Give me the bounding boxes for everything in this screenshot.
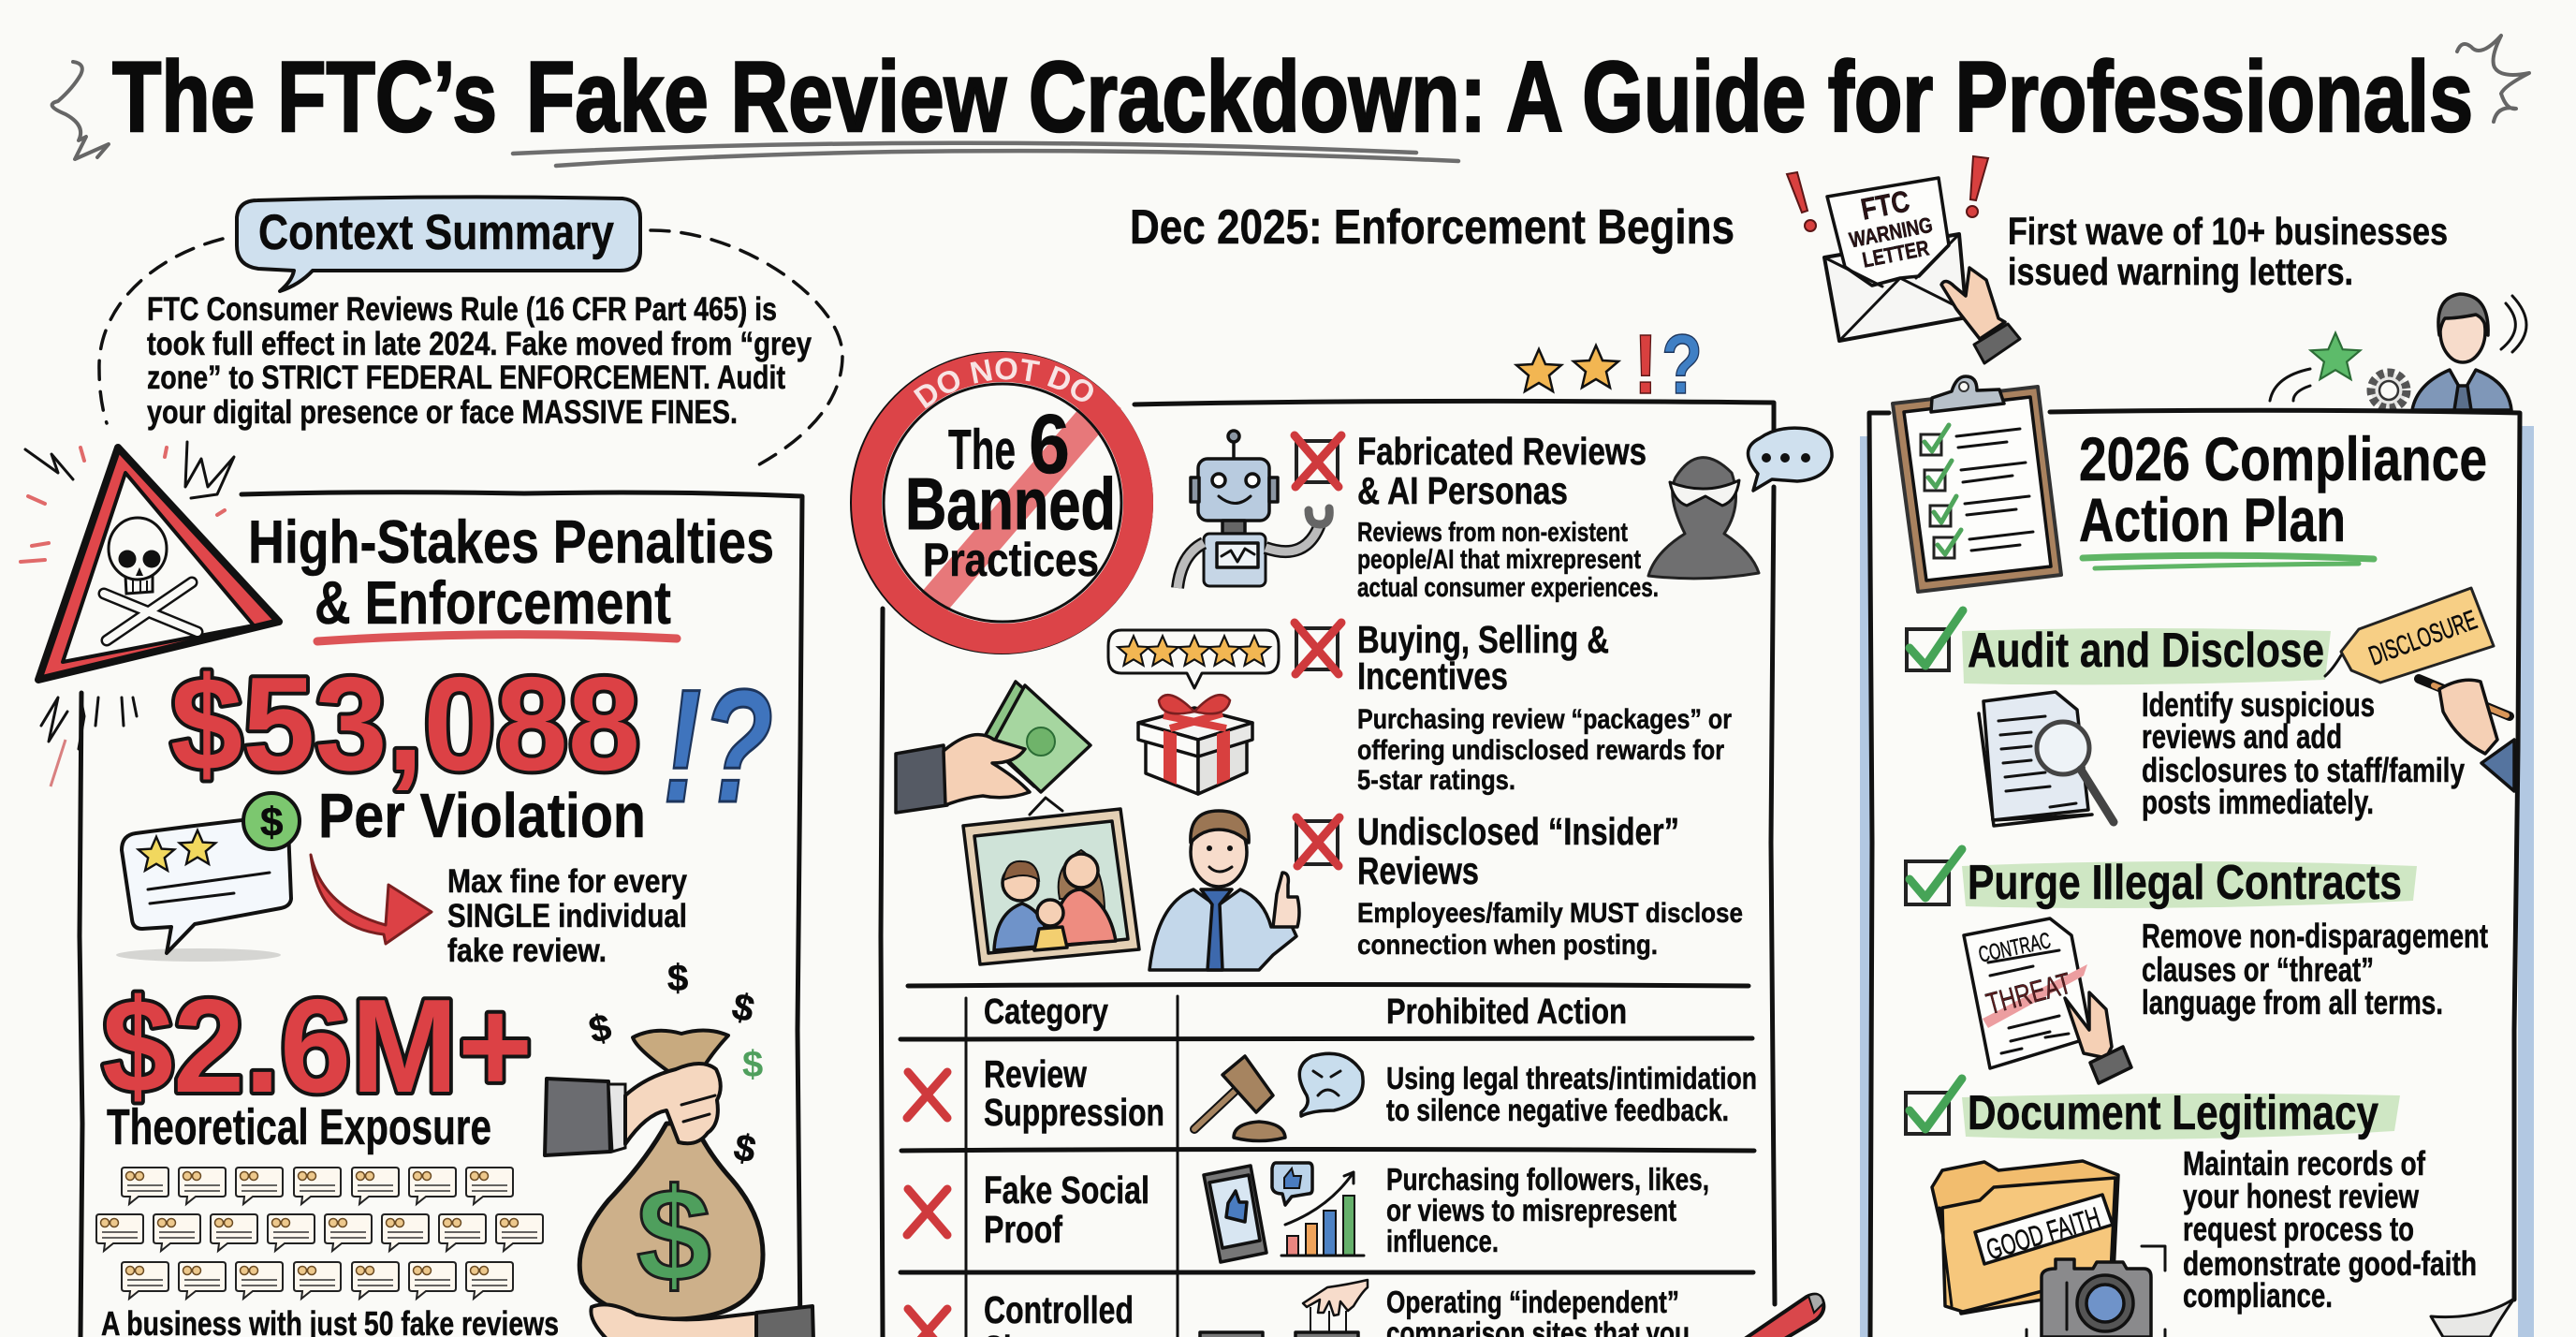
icon: stars and interrobang: !	[1633, 318, 1658, 412]
icon: five star bubble	[1108, 630, 1279, 688]
icon: stars and interrobang: ?	[1661, 318, 1703, 412]
text: first wave	[2008, 210, 2448, 293]
panel: high-stakes penalties	[21, 442, 813, 1337]
icon: red exclamation marks	[1787, 156, 1988, 231]
icon: floating dollar signs: $	[667, 958, 688, 999]
text: document description: request process to	[2183, 1210, 2414, 1248]
practice: fabricated reviews: & AI Personas	[1357, 469, 1568, 512]
icon: FTC warning letter envelope: LETTER	[1860, 235, 1931, 272]
icon: gift box	[1138, 695, 1252, 794]
practice: fabricated reviews	[1357, 430, 1659, 603]
title: Fake Review Crackdown:	[526, 40, 1486, 153]
row: review suppression: to silence negative feedback.	[1386, 1093, 1729, 1127]
heading: the 6 banned practices: Banned	[905, 463, 1116, 545]
icon: title scribble right	[2457, 36, 2529, 122]
panel: six banned practices	[850, 318, 1834, 1337]
icon: good faith folder: GOOD FAITH	[1983, 1201, 2104, 1267]
title underline	[513, 143, 1458, 166]
panel: 2026 compliance action plan	[1860, 376, 2534, 1337]
text: audit description: Identify suspicious	[2142, 685, 2375, 724]
table: prohibited practices	[900, 985, 1757, 1337]
practice: fabricated reviews: Reviews from non-existent	[1357, 518, 1628, 548]
row: controlled sites: Controlled	[984, 1288, 1134, 1331]
text: document description: your honest review	[2183, 1177, 2420, 1215]
icon: contract with threat: THREAT	[1983, 966, 2074, 1021]
row: review suppression: Review	[984, 1052, 1087, 1095]
heading: the 6 banned practices: Practices	[923, 534, 1099, 586]
row: controlled sites	[907, 1280, 1690, 1337]
row: fake social proof: or views to misrepresent	[1386, 1193, 1676, 1227]
heading: 2026 compliance: 2026 Compliance	[2079, 424, 2487, 493]
icon grid: fake review bubbles	[96, 1168, 543, 1299]
text: purge description: language from all terms.	[2142, 983, 2443, 1021]
heading: high-stakes penalties: & Enforcement	[315, 568, 671, 637]
heading: high-stakes penalties: High-Stakes Penalties	[248, 507, 774, 576]
icon: floating dollar signs: $	[742, 1044, 763, 1085]
icon: clipboard checklist	[1893, 376, 2061, 592]
heading: the 6 banned practices: The	[948, 419, 1016, 481]
icon: review bubble with dollar	[116, 793, 300, 962]
icon: framed family photo	[963, 798, 1139, 964]
heading: the 6 banned practices	[905, 398, 1116, 586]
icon: stars and interrobang	[1516, 318, 1703, 412]
icon: floating dollar signs: $	[585, 1006, 615, 1051]
row: fake social proof: Purchasing followers, likes,	[1386, 1162, 1709, 1197]
heading: the 6 banned practices: 6	[1029, 398, 1070, 492]
practice: undisclosed insider: Reviews	[1357, 849, 1479, 892]
title	[112, 40, 2473, 153]
icon: masked reviewer	[1648, 458, 1759, 579]
icon: red marker pen	[1742, 1294, 1823, 1337]
practice: buying selling incentives: 5-star ratings.	[1357, 765, 1515, 796]
row: review suppression: Suppression	[984, 1091, 1164, 1134]
action: document legitimacy: Document Legitimacy	[1968, 1086, 2378, 1140]
heading: high-stakes penalties	[248, 507, 774, 637]
icon: camera	[2027, 1246, 2165, 1337]
practice: buying selling incentives	[1357, 618, 1732, 796]
action: audit and disclose	[1907, 610, 2331, 684]
row: fake social proof: influence.	[1386, 1224, 1499, 1258]
icon: floating dollar signs: $	[728, 986, 758, 1031]
icon: FTC warning letter envelope: WARNING	[1847, 213, 1935, 252]
icon: professional with gear and star	[2270, 294, 2526, 410]
icon: warning triangle with skull	[38, 448, 279, 680]
icon: money bag in hand	[545, 1030, 813, 1337]
row: controlled sites: Operating “independent”	[1386, 1285, 1679, 1319]
icon: disclosure tag	[2325, 588, 2494, 683]
row: review suppression	[907, 1052, 1757, 1140]
practice: undisclosed insider: Employees/family MUST disclose	[1357, 898, 1743, 929]
icon: do not do prohibition sign: DO NOT DO	[914, 358, 1093, 408]
text: purge description: clauses or “threat”	[2142, 950, 2374, 989]
context body text: took full effect in late 2024. Fake moved from “grey	[147, 326, 812, 362]
icon: hand with pen	[2419, 679, 2514, 791]
heading: 2026 compliance	[2079, 424, 2487, 554]
practice: undisclosed insider	[1357, 810, 1743, 961]
green heading underline	[2083, 555, 2374, 568]
table header	[984, 992, 1627, 1032]
blue side strips	[1860, 426, 2534, 1337]
practice: undisclosed insider: connection when posting.	[1357, 930, 1658, 961]
action: document legitimacy	[1906, 1079, 2400, 1140]
label: per violation: Per Violation	[318, 781, 646, 851]
text: audit description	[2142, 685, 2465, 821]
context body text	[147, 291, 812, 431]
arrow: to max fine	[311, 855, 432, 944]
icon: hand with cash	[896, 682, 1090, 813]
icon: blue interrobang: !?	[663, 656, 773, 836]
icon: robot	[1178, 431, 1329, 588]
icon: red crossed box 3	[1296, 817, 1339, 866]
icon: good faith folder	[1932, 1161, 2118, 1314]
heading: 2026 compliance: Action Plan	[2079, 485, 2346, 554]
icon: floating dollar signs: $	[730, 1126, 759, 1171]
heading bubble: context summary: Context Summary	[258, 205, 614, 260]
text: max fine	[447, 863, 687, 969]
icon: contract with threat: CONTRAC	[1976, 928, 2053, 968]
practice: buying selling incentives: Buying, Selling &	[1357, 618, 1609, 661]
icon: do not do prohibition sign	[850, 351, 1153, 654]
practice: fabricated reviews: actual consumer experiences.	[1357, 573, 1659, 603]
text: audit description: posts immediately.	[2142, 783, 2374, 821]
icon: document with magnifier	[1979, 692, 2114, 826]
text: first wave: issued warning letters.	[2008, 250, 2353, 293]
context body text: FTC Consumer Reviews Rule (16 CFR Part 465) is	[147, 291, 777, 328]
table rules	[900, 985, 1754, 1337]
dashed outline	[99, 230, 842, 468]
practice: buying selling incentives: Purchasing review “packages” or	[1357, 704, 1732, 735]
practice: fabricated reviews: Fabricated Reviews	[1357, 430, 1647, 473]
row: fake social proof	[907, 1162, 1709, 1262]
title: The FTC’s	[112, 40, 497, 153]
practice: undisclosed insider: Undisclosed “Insider”	[1357, 810, 1679, 853]
context body text: your digital presence or face MASSIVE FINES.	[147, 394, 738, 431]
icon: page curl	[2431, 1299, 2514, 1337]
icon: floating dollar signs	[585, 958, 763, 1171]
icon: title scribble left	[52, 62, 109, 159]
text: document description	[2183, 1144, 2477, 1315]
panel: middle timeline heading: Dec 2025: Enforcement Begins	[1130, 200, 1734, 255]
stat: $53,088: $53,088	[170, 650, 640, 799]
panel: context summary	[99, 197, 842, 468]
action: audit and disclose: Audit and Disclose	[1968, 624, 2324, 678]
icon: warning sparks	[21, 442, 234, 786]
action: purge illegal contracts: Purge Illegal Contracts	[1968, 856, 2402, 910]
action: purge illegal contracts	[1906, 849, 2417, 910]
stat: $2.6M+: $2.6M+	[102, 972, 533, 1121]
context body text: zone” to STRICT FEDERAL ENFORCEMENT. Audit	[147, 360, 785, 396]
text: max fine: fake review.	[447, 933, 607, 969]
panel outline	[80, 492, 802, 1337]
icon: red crossed box 2	[1295, 623, 1341, 674]
table header: Category	[984, 992, 1108, 1032]
heading bubble: context summary	[237, 197, 640, 291]
text: first wave: First wave of 10+ businesses	[2008, 210, 2448, 253]
table header: Prohibited Action	[1386, 992, 1627, 1032]
icon: blue speech bubble with dots	[1748, 428, 1832, 491]
icon: red crossed box 1	[1295, 435, 1341, 487]
text: max fine: Max fine for every	[447, 863, 687, 900]
text: purge description	[2142, 917, 2488, 1021]
panel outline	[881, 401, 1775, 1337]
icon: contract with threat	[1964, 918, 2131, 1083]
icon: FTC warning letter envelope	[1824, 178, 2020, 363]
row: fake social proof: Fake Social	[984, 1168, 1149, 1212]
row: review suppression: Using legal threats/intimidation	[1386, 1061, 1757, 1095]
text: audit description: reviews and add	[2142, 717, 2342, 756]
text: audit description: disclosures to staff/family	[2142, 751, 2465, 789]
icon: employee thumbs up	[1149, 811, 1299, 970]
text: document description: Maintain records of	[2183, 1144, 2426, 1183]
icon: disclosure tag: DISCLOSURE	[2365, 605, 2481, 671]
red heading underline	[317, 635, 677, 641]
panel outline	[1869, 410, 2520, 1337]
label: theoretical exposure: Theoretical Exposure	[107, 1099, 491, 1155]
practice: buying selling incentives: offering undisclosed rewards for	[1357, 735, 1724, 766]
text: max fine: SINGLE individual	[447, 898, 687, 934]
practice: buying selling incentives: Incentives	[1357, 654, 1508, 698]
icon: FTC warning letter envelope: FTC	[1858, 184, 1912, 227]
icon: review bubble with dollar: $	[260, 800, 283, 845]
text: document description: demonstrate good-faith	[2183, 1244, 2477, 1283]
text: document description: compliance.	[2183, 1276, 2333, 1315]
row: fake social proof: Proof	[984, 1208, 1062, 1251]
icon: money bag in hand: $	[637, 1161, 711, 1310]
practice: fabricated reviews: people/AI that mixrepresent	[1357, 545, 1641, 575]
